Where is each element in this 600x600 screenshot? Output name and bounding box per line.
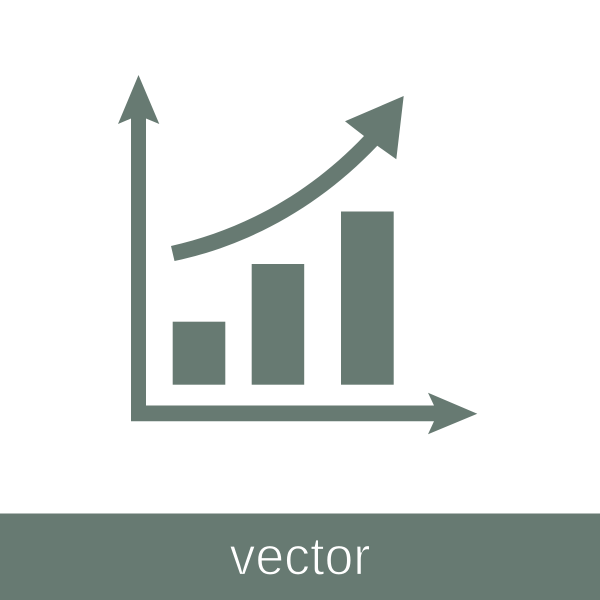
banner — [0, 514, 600, 600]
bar 1 — [173, 322, 225, 385]
bar 3 — [341, 212, 394, 385]
growth arrow — [171, 96, 404, 261]
x axis arrow — [131, 393, 477, 434]
y axis arrow — [118, 75, 159, 406]
axes with arrows — [118, 75, 477, 434]
banner label: vector — [230, 526, 371, 586]
bar 2 — [252, 264, 304, 385]
bars — [173, 212, 394, 385]
